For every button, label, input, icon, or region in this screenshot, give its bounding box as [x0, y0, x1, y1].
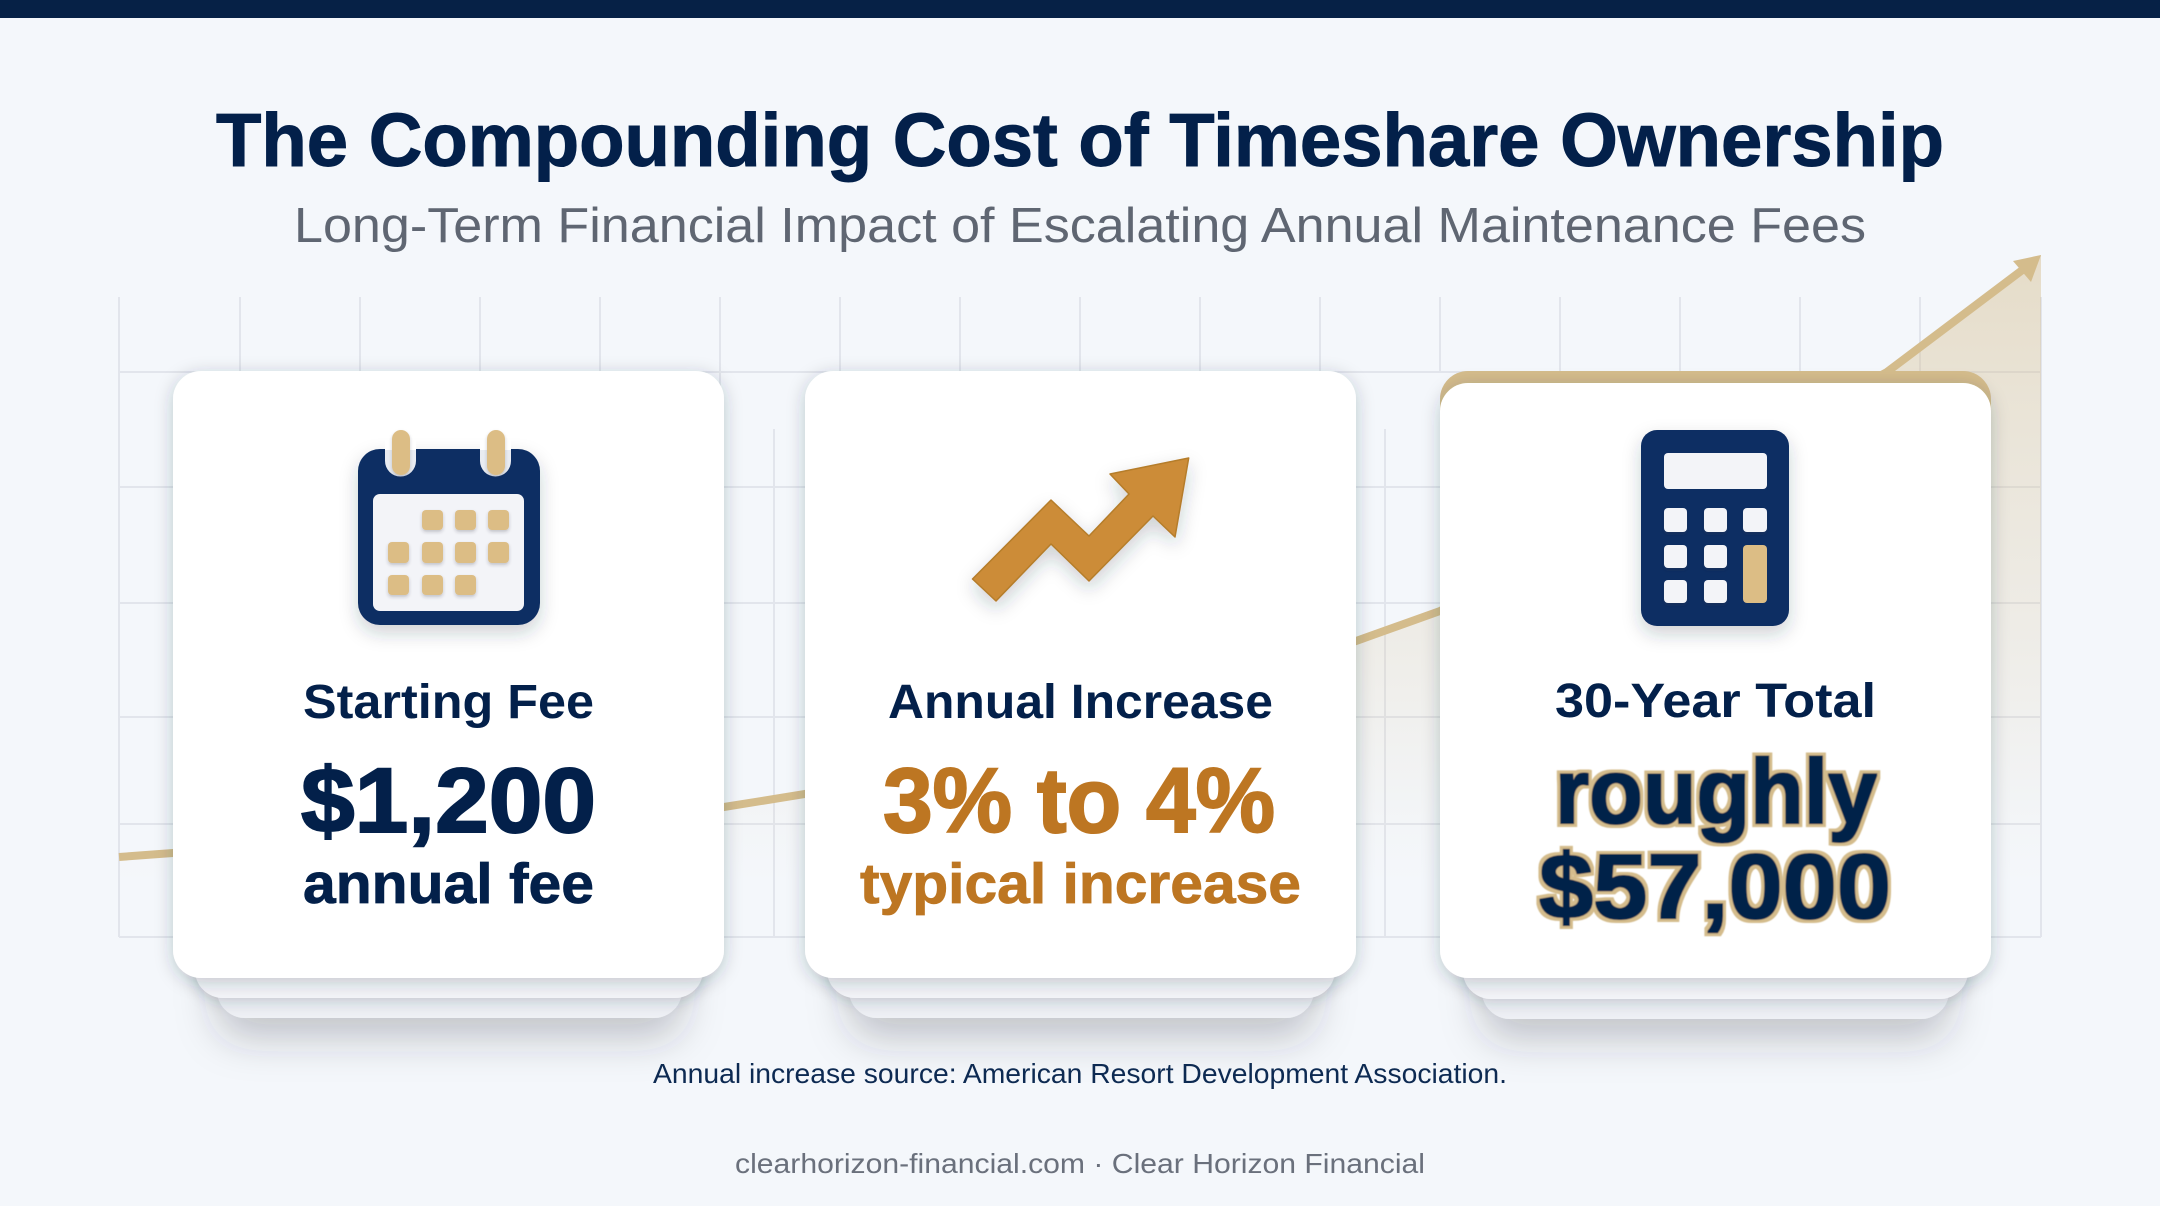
source note: Annual increase source: American Resort Development Association. [653, 1058, 1507, 1089]
background chart: rising cost curve on grid [119, 255, 2041, 937]
footer: clearhorizon-financial.com · Clear Horizon Financial [735, 1148, 1425, 1179]
label: annual increase: Annual Increase [888, 676, 1273, 729]
value: roughly: roughly [1555, 741, 1877, 843]
icon: calendar [358, 430, 540, 625]
caption: annual fee: annual fee [303, 852, 594, 916]
panel: 30-year total [1440, 371, 1991, 1019]
caption: typical increase: typical increase [860, 852, 1301, 916]
label: 30-year total: 30-Year Total [1555, 675, 1876, 728]
label: starting fee: Starting Fee [303, 676, 594, 729]
icon: rising arrow [972, 458, 1189, 601]
value: 3% to 4%: 3% to 4% [883, 750, 1275, 852]
value: $1,200: $1,200 [301, 750, 596, 852]
panel: annual increase [805, 371, 1356, 1018]
value: $57,000: $57,000 [1539, 836, 1891, 938]
icon: calculator [1641, 430, 1789, 626]
top bar [0, 0, 2160, 18]
subtitle: Long-Term Financial Impact of Escalating Annual Maintenance Fees [294, 199, 1866, 253]
panel: starting fee [173, 371, 724, 1018]
title: The Compounding Cost of Timeshare Ownership [216, 98, 1944, 182]
